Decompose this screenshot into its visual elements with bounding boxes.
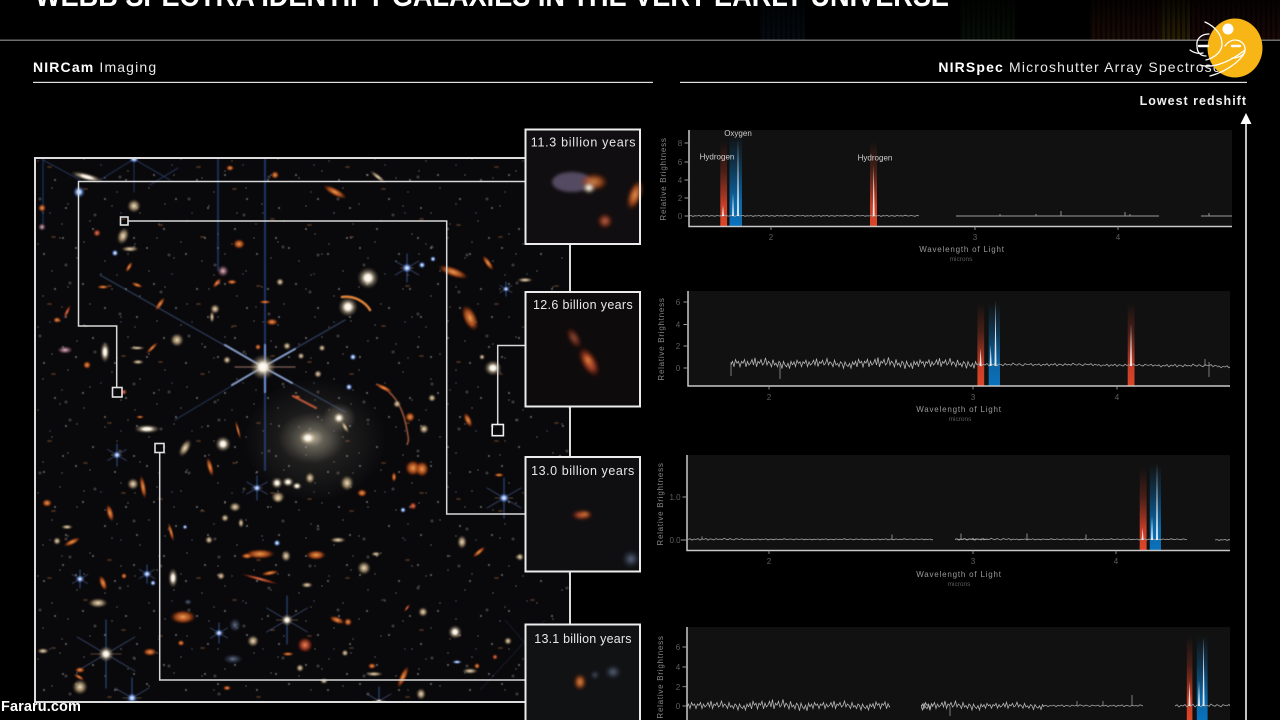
axes	[687, 455, 1230, 550]
emission bands	[977, 303, 1134, 386]
main diffraction-spike star	[43, 158, 345, 470]
inset: 13.0 billion years	[526, 457, 640, 572]
spectrum line	[731, 357, 1277, 379]
y tick labels: 2	[676, 342, 681, 351]
y tick labels: 0	[678, 212, 683, 221]
emission bands	[1140, 464, 1161, 550]
y axis title: Relative Brightness	[656, 462, 665, 546]
y tick labels: 8	[678, 139, 683, 148]
inset: 12.6 billion years	[526, 292, 640, 406]
element labels: Hydrogen	[700, 152, 734, 162]
cluster haze	[258, 390, 370, 488]
y tick labels: 4	[676, 663, 681, 672]
x tick labels: 4	[1116, 233, 1121, 242]
header divider	[0, 40, 1280, 41]
emission bands	[1187, 636, 1208, 720]
background spectrum strip	[600, 0, 1280, 40]
section heading: NIRCam Imaging: NIRCam Imaging	[33, 59, 157, 75]
galaxies: upper left	[38, 155, 387, 440]
axes	[689, 130, 1232, 226]
x axis unit: microns	[950, 256, 973, 263]
y tick labels: 6	[676, 298, 681, 307]
y axis title: Relative Brightness	[656, 635, 665, 719]
y axis title: Relative Brightness	[657, 297, 666, 381]
logo: Fararu emblem	[1190, 18, 1262, 78]
y tick labels: 6	[678, 158, 683, 167]
y tick labels: 6	[676, 643, 681, 652]
inset: 13.1 billion years: 13.1 billion years	[534, 632, 632, 646]
element labels: Hydrogen	[858, 154, 892, 162]
inset: 13.0 billion years: 13.0 billion years	[531, 464, 635, 478]
watermark: Fararu.com	[1, 699, 81, 715]
y tick labels: 2	[678, 194, 683, 203]
y tick labels	[669, 493, 681, 545]
x tick labels: 3	[973, 233, 978, 242]
spectrum chart: 12.6 billion years	[657, 291, 1277, 423]
section heading: NIRSpec Microshutter Array Spectroscopy: NIRSpec Microshutter Array Spectroscopy	[938, 59, 1247, 75]
emission peaks	[722, 139, 875, 216]
axes	[688, 291, 1230, 386]
x tick labels: 4	[1114, 557, 1119, 566]
emission peaks	[980, 300, 1132, 366]
spectrum chart: 13.1 billion years	[656, 627, 1280, 720]
axis ticks	[681, 497, 1116, 554]
y tick labels	[678, 139, 683, 221]
inset: 12.6 billion years: 12.6 billion years	[533, 298, 633, 312]
spectrum line	[689, 211, 1232, 216]
redshift arrow	[1240, 113, 1252, 720]
axis ticks	[684, 302, 1117, 390]
emission peaks	[1188, 637, 1205, 706]
axis ticks	[682, 647, 687, 706]
callout line: 11.3 billion years	[78, 182, 525, 397]
x tick labels: 2	[767, 557, 772, 566]
x tick labels: 3	[971, 393, 976, 402]
inset: 11.3 billion years	[526, 130, 647, 244]
redshift axis label: Lowest redshift	[1140, 94, 1247, 108]
y tick labels: 0	[676, 364, 681, 373]
y tick labels	[676, 643, 681, 711]
spectrum chart: 13.0 billion years	[656, 455, 1275, 588]
y axis title: Relative Brightness	[659, 137, 668, 221]
x axis title: Wavelength of Light	[916, 570, 1002, 579]
callout line: 12.6 billion years	[492, 346, 525, 436]
galaxies: centre right with lensed arcs	[271, 254, 533, 518]
y tick labels	[676, 298, 681, 373]
y tick labels: 4	[678, 176, 683, 185]
callout line: 13.1 billion years	[155, 444, 525, 680]
inset: 11.3 billion years: 11.3 billion years	[531, 136, 636, 150]
spectrum line	[688, 534, 1275, 540]
element labels: Oxygen	[724, 129, 752, 138]
element labels	[700, 129, 892, 162]
x tick labels: 4	[1115, 393, 1120, 402]
x axis unit: microns	[948, 581, 971, 588]
x tick labels	[769, 233, 1121, 242]
x tick labels	[767, 393, 1120, 402]
galaxies: lower field	[37, 436, 545, 718]
emission bands	[720, 135, 877, 226]
x axis title: Wavelength of Light	[919, 245, 1005, 254]
x tick labels: 2	[767, 393, 772, 402]
spectrum line	[687, 695, 1280, 716]
y tick labels: 4	[676, 320, 681, 330]
x axis title: Wavelength of Light	[916, 405, 1002, 414]
callout line: 13.0 billion years	[120, 217, 525, 514]
y tick labels: 1.0	[669, 493, 681, 502]
inset: 13.1 billion years	[526, 624, 640, 720]
axis ticks	[684, 143, 1118, 230]
y tick labels: 0.0	[669, 536, 681, 545]
x tick labels	[767, 557, 1119, 566]
x tick labels: 3	[971, 557, 976, 566]
NIRCam deep field image	[35, 155, 570, 718]
y axis	[686, 627, 688, 720]
spectrum chart: 11.3 billion years	[659, 129, 1232, 263]
x axis unit: microns	[949, 416, 972, 423]
y tick labels: 2	[676, 683, 681, 692]
x tick labels: 2	[769, 233, 774, 242]
y tick labels: 0	[676, 702, 681, 711]
emission peaks	[1142, 463, 1158, 540]
